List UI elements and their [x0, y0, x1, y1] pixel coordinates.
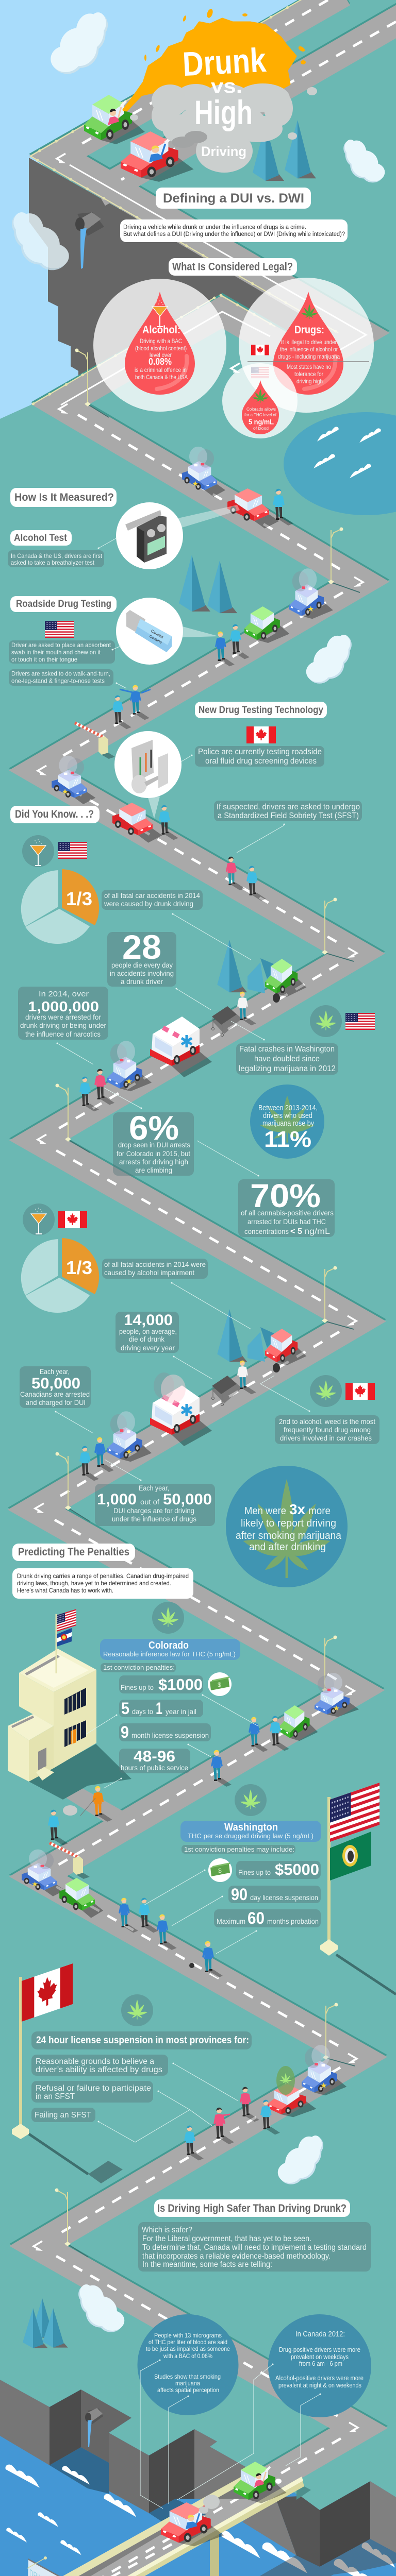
stat: 50,000 arrests: Each year,: [40, 1367, 70, 1376]
reason 3: Failing an SFST: [35, 2111, 91, 2120]
heading: [31, 2031, 252, 2049]
text: breathalyzer: [8, 550, 104, 567]
public service: [119, 1748, 190, 1773]
header: [100, 1639, 240, 1660]
stat: 70 percent: < 5: [290, 1227, 302, 1236]
text: Canada fatal accidents: [102, 1259, 208, 1279]
reason 2: [31, 2081, 153, 2103]
probation: Maximum: [217, 1917, 245, 1925]
title splash: [124, 8, 317, 173]
text: oral fluid devices: [195, 746, 324, 767]
panel: colorado THC limit: 5 ng/mL: [249, 417, 274, 426]
heading: defining a DUI vs DWI: Defining a DUI vs. DWI: [163, 191, 304, 206]
fine: $1000: [158, 1675, 203, 1693]
heading: is driving high safer: [154, 2199, 350, 2217]
public service: 48-96: [134, 1748, 175, 1765]
stat: 14,000: driving every year: [121, 1344, 175, 1352]
panel: colorado THC limit: of blood: [253, 426, 269, 431]
text: Washington crashes: have doubled since: [254, 1055, 320, 1063]
text: sobriety moves: Drivers are asked to do walk-and-turn,: [11, 670, 110, 677]
panel: drugs: [239, 278, 374, 413]
magnifier: breathalyzer: [116, 502, 240, 569]
stat: 28: 28: [122, 928, 161, 966]
pie chart: Canada fatal accidents: 1/3: [66, 1257, 92, 1278]
magnifier: swab test strip: Canabis: [150, 629, 164, 639]
flag: USA: [45, 621, 74, 638]
panel: drugs: driving high: [296, 378, 323, 385]
probation: months probation: [267, 1917, 319, 1925]
flag: Canada: [246, 726, 276, 743]
text: standardized field sobriety test: If suspected, drivers are asked to undergo: [217, 803, 360, 811]
icon: leaf: [235, 1784, 267, 1816]
panel: colorado THC limit: for a THC level of: [244, 412, 277, 417]
flags on jail: [57, 1609, 76, 1632]
panel: drugs: drugs - including marijuana: [278, 353, 340, 360]
heading: roadside drug testing: Roadside Drug Testing: [16, 599, 111, 609]
lake: [284, 412, 396, 515]
stat: 1,000,000: drivers were arrested for: [25, 1013, 101, 1021]
exhaust puffs on bridge: [199, 2479, 282, 2514]
text: standardized field sobriety test: a Standardized Field Sobriety Test (SFST): [218, 811, 359, 820]
barriers: [50, 723, 115, 1879]
text: sobriety moves: [9, 669, 113, 686]
pie chart: US fatal accidents: 1/3: [66, 888, 92, 909]
text: weed second to alcohol: 2nd to alcohol, weed is the most: [279, 1417, 375, 1426]
stat: men 3x more likely: 3x: [289, 1501, 305, 1517]
people: [49, 489, 293, 2160]
stat: 1,000,000: In 2014, over: [39, 990, 89, 998]
heading: predicting the penalties: Predicting The Penalties: [18, 1546, 129, 1558]
license suspension: [228, 1885, 321, 1904]
stat: 6 percent: arrests for driving high: [119, 1158, 188, 1166]
stat: 11 percent: marijuana rose by: [262, 1120, 315, 1128]
panel: colorado penalties: [100, 1602, 240, 1773]
text: standardized field sobriety test: [214, 801, 362, 821]
heading: alcohol test: Alcohol Test: [14, 533, 68, 544]
text: swab: swab in their mouth and chew on it: [11, 649, 101, 656]
circle: Canada 2012: prevalent on weekdays: [291, 2353, 349, 2361]
magnifier: swab test strip: [116, 598, 219, 665]
circle: Canada 2012: prevalent at night & on weekends: [278, 2382, 361, 2389]
large flagpole: USA and Washington: [320, 1783, 396, 1994]
stat: 70 percent: of all cannabis-positive drivers: [241, 1209, 334, 1217]
magnifier: swab test strip: Cocaine: [148, 634, 163, 645]
icon: martini with US flag: [22, 835, 87, 867]
circle: Canada 2012: Drug-positive drivers were more: [279, 2346, 360, 2353]
stat: 70 percent: [238, 1177, 335, 1237]
circle: Canada 2012: from 6 am - 6 pm: [299, 2360, 342, 2367]
connector lines: [55, 538, 321, 2509]
fine: [119, 1675, 203, 1693]
reason 1: Reasonable grounds to believe a: [36, 2057, 154, 2066]
pie chart: US fatal accidents: [21, 869, 99, 944]
circle: THC facts: People with 13 micrograms: [154, 2332, 222, 2339]
stat: men 3x more likely: and after drinking: [249, 1541, 326, 1553]
icon: martini with Canada flag: [23, 1204, 87, 1235]
stat: 6 percent: are climbing: [135, 1166, 172, 1174]
stat: 50,000 arrests: Canadians are arrested: [20, 1390, 90, 1398]
stat: 28: a drunk driver: [121, 977, 163, 986]
reason 2: in an SFST: [36, 2092, 75, 2101]
license suspension: 90: [231, 1885, 248, 1904]
stat: men 3x more likely: after smoking marijuana: [236, 1530, 342, 1541]
stat: 1,000 out of 50,000: Each year,: [139, 1484, 169, 1492]
text: which is safer: In the meantime, some facts are telling:: [142, 2260, 272, 2269]
text: Canada fatal accidents: of all fatal accidents in 2014 were: [104, 1261, 206, 1268]
stat: 28: in accidents involving: [110, 969, 174, 977]
panel: drugs: the influence of alcohol or: [280, 346, 338, 353]
stat: 1,000,000: the influence of narcotics: [25, 1030, 101, 1038]
smoke cloud: [130, 83, 317, 173]
large flagpole: Canada: [12, 1963, 123, 2183]
panel: alcohol: level over: [150, 351, 172, 359]
fine: Fines up to: [121, 1683, 154, 1691]
stat: 6 percent: [113, 1109, 194, 1176]
heading: what is considered legal: What Is Considered Legal?: [172, 261, 293, 273]
stat: men 3x more likely: more: [308, 1505, 331, 1517]
header: THC per se drugged driving law (5 ng/mL): [188, 1832, 314, 1840]
jail driveway: [57, 1783, 124, 1823]
title text: Driving: [201, 144, 246, 159]
stat: 1,000 out of 50,000: 1,000: [97, 1491, 137, 1508]
circle: THC facts: [137, 2314, 238, 2415]
intro text: [120, 219, 348, 242]
stat: 50,000 arrests: 50,000: [31, 1375, 80, 1392]
stat: men 3x more likely: Men were: [244, 1505, 286, 1517]
fine: Fines up to: [238, 1868, 271, 1876]
icon: money: [208, 1672, 232, 1696]
text: Washington crashes: Fatal crashes in Washington: [239, 1045, 335, 1054]
icon: leaf: [121, 1994, 153, 2026]
stat: 70 percent: concentrations: [244, 1227, 289, 1235]
bridge: [0, 2473, 304, 2576]
solid lane lines: [61, 165, 366, 405]
broken trees at crash scenes: [248, 958, 278, 1362]
jail term: days to: [132, 1707, 153, 1716]
stat: 1,000,000: drunk driving or being under: [20, 1021, 106, 1029]
intro text: But what defines a DUI (Driving under the influence) or DWI (Driving while intoxicated)?: [123, 231, 345, 238]
heading: did you know: Did You Know. . .?: [15, 808, 94, 820]
heading: how is it measured: [10, 488, 117, 507]
text: Canada fatal accidents: caused by alcohol impairment: [104, 1269, 194, 1277]
reason 1: driver’s ability is affected by drugs: [36, 2065, 162, 2074]
heading: alcohol test: [10, 530, 72, 546]
heading: new drug testing technology: [195, 702, 327, 718]
panel: colorado THC limit: [222, 363, 298, 438]
heading: predicting the penalties: [12, 1544, 135, 1561]
title text: [182, 41, 267, 159]
circle: THC facts: Studies show that smoking: [154, 2373, 221, 2380]
text: breathalyzer: asked to take a breathalyzer test: [11, 559, 95, 566]
second drain pipe: [85, 2408, 103, 2447]
text: penalties intro: driving laws, though, have yet to be determined and created.: [17, 1580, 171, 1587]
background: sky: [0, 0, 396, 464]
jail term: [119, 1699, 203, 1718]
panel: colorado THC limit: Colorado allows: [246, 406, 276, 412]
heading: new drug testing technology: New Drug Testing Technology: [199, 705, 323, 716]
probation: [214, 1909, 321, 1927]
heading: defining a DUI vs DWI: [156, 188, 311, 209]
stat: 70 percent: arrested for DUIs had THC: [248, 1217, 326, 1226]
stat: 1,000,000: [18, 987, 108, 1040]
text: weed second to alcohol: drivers involved in car crashes: [280, 1434, 372, 1442]
stat: 50,000 arrests: [20, 1366, 91, 1408]
stat: 70 percent: 70%: [250, 1177, 321, 1214]
stat: 1,000 out of 50,000: out of: [140, 1498, 159, 1506]
sign: drive carefully: [27, 2556, 82, 2576]
stat: 11 percent: Between 2013-2014,: [258, 1104, 318, 1112]
street sweeping dust: [63, 1798, 95, 1816]
stat: 14,000: people, on average,: [119, 1327, 177, 1335]
circle: THC facts: marijuana: [175, 2380, 200, 2387]
header: [180, 1821, 321, 1842]
heading: how is it measured: How Is It Measured?: [14, 492, 114, 503]
text: US fatal accidents: were caused by drunk driving: [104, 900, 193, 908]
fine: $5000: [275, 1860, 319, 1878]
text: breathalyzer: In Canada & the US, drivers are first: [11, 552, 103, 560]
icon: money: $: [218, 1867, 222, 1874]
circle: THC facts: affects spatial perception: [157, 2386, 219, 2394]
stat: 28: [107, 928, 176, 987]
panel: washington penalties: [180, 1784, 321, 1927]
stat: 1,000 out of 50,000: DUI charges are for driving: [113, 1506, 194, 1515]
icon: leaf: [152, 1602, 184, 1634]
text: swab: [9, 640, 115, 664]
stretchers: [211, 1006, 242, 1405]
header: Colorado: [148, 1640, 189, 1651]
header: Reasonable inference law for THC (5 ng/mL): [103, 1650, 236, 1658]
penalties label: 1st conviction penalties may include:: [184, 1845, 294, 1853]
intro text: Driving a vehicle while drunk or under the influence of drugs is a crime.: [123, 225, 306, 231]
stat: 6 percent: for Colorado in 2015, but: [117, 1149, 190, 1158]
reason 1: [31, 2055, 168, 2076]
circle: Canada 2012: In Canada 2012:: [295, 2330, 345, 2338]
stat: 1,000 out of 50,000: [95, 1484, 215, 1526]
circle: Canada 2012: [268, 2314, 371, 2417]
text: sobriety moves: one-leg-stand & finger-to-nose tests: [11, 677, 105, 684]
text: penalties intro: [12, 1568, 193, 1599]
stat: 14,000: 14,000: [124, 1312, 173, 1329]
pie chart: Canada fatal accidents: [21, 1238, 99, 1313]
probation: 60: [248, 1909, 265, 1927]
license suspension: [119, 1723, 211, 1741]
public service: hours of public service: [121, 1764, 188, 1772]
heading: roadside drug testing: [10, 596, 117, 612]
background: water: [0, 2349, 396, 2576]
stat: 1,000 out of 50,000: under the influence of drugs: [112, 1515, 196, 1523]
stat: 1,000 out of 50,000: 50,000: [163, 1491, 212, 1508]
license suspension: month license suspension: [131, 1731, 209, 1739]
icon: leaf with Canada flag: [310, 1375, 375, 1407]
circle: THC facts: to be just as impaired as someone: [146, 2345, 230, 2352]
stat: 50,000 arrests: and charged for DUI: [26, 1398, 86, 1406]
text: which is safer: To determine that, Canada will need to implement a testing standard: [142, 2243, 367, 2252]
fine: [236, 1860, 321, 1879]
stat: men 3x more likely: [226, 1466, 348, 1587]
circle: Canada 2012: Alcohol-positive drivers were more: [275, 2375, 364, 2382]
panel: drugs: tolerance for: [294, 370, 323, 378]
stat: 11 percent: drivers who used: [263, 1112, 312, 1120]
text: US fatal accidents: of all fatal car accidents in 2014: [104, 892, 200, 900]
license suspension: day license suspension: [250, 1893, 318, 1902]
text: which is safer: For the Liberal government, that has yet to be seen.: [142, 2234, 311, 2243]
stat: 1,000,000: 1,000,000: [28, 998, 99, 1014]
title text: Drunk: [182, 41, 267, 83]
stat: 14,000: die of drunk: [129, 1335, 165, 1343]
panel: alcohol: Driving with a BAC: [140, 337, 182, 345]
panel: canada suspension: [31, 1994, 252, 2122]
panel: alcohol: 0.08%: [148, 357, 172, 367]
trees: [23, 120, 316, 2348]
stat: 28: people die every day: [111, 961, 173, 969]
heading: what is considered legal: [169, 258, 297, 276]
text: weed second to alcohol: [275, 1415, 380, 1444]
reason 2: Refusal or failure to participate: [36, 2084, 151, 2093]
upper cliff face: [29, 158, 338, 384]
bridge shadow on water: [0, 2539, 396, 2576]
panel: alcohol: Alcohol:: [142, 324, 180, 336]
heading: 24 hour license suspension in most provinces for:: [36, 2035, 249, 2046]
turn arrows: [34, 154, 363, 2432]
penalties label: 1st conviction penalties:: [103, 1664, 175, 1671]
text: weed second to alcohol: frequently found drug among: [284, 1426, 371, 1434]
text: US fatal accidents: [102, 890, 203, 910]
panel: drugs: Most states have no: [287, 363, 331, 370]
drain pipe: [75, 212, 104, 269]
lamp posts: [55, 348, 360, 2257]
jail term: year in jail: [166, 1707, 196, 1716]
text: Washington crashes: [236, 1043, 338, 1075]
stat: 11 percent: [250, 1084, 324, 1159]
magnifier: oral fluid device: [114, 731, 182, 819]
circle: THC facts: of THC per liter of blood are said: [148, 2338, 227, 2346]
text: penalties intro: Drunk driving carries a range of penalties. Canadian drug-impaired: [17, 1572, 189, 1580]
panel: alcohol: is a criminal offence in: [135, 366, 187, 374]
jail term: 1: [156, 1699, 162, 1718]
text: oral fluid devices: Police are currently testing roadside: [198, 748, 322, 756]
title text: High: [194, 93, 253, 131]
heading: is driving high safer: Is Driving High Safer Than Driving Drunk?: [157, 2202, 346, 2214]
circle: THC facts: with a BAC of 0.08%: [163, 2352, 212, 2360]
text: swab: Driver are asked to place an absorbent: [11, 641, 111, 649]
stat: 11 percent: 11%: [264, 1127, 311, 1152]
header: Washington: [224, 1822, 278, 1833]
panel: alcohol: [93, 279, 226, 412]
water waves: [5, 2465, 395, 2576]
text: which is safer: Which is safer?: [142, 2226, 192, 2234]
icon: money: [208, 1858, 232, 1882]
stat: men 3x more likely: likely to report driving: [241, 1518, 336, 1529]
panel: alcohol: both Canada & the USA: [135, 374, 188, 381]
text: penalties intro: Here’s what Canada has to work with.: [17, 1587, 113, 1594]
text: which is safer: that incorporates a reliable evidence-based methodology.: [142, 2252, 331, 2261]
panel: drugs: Drugs:: [294, 324, 324, 336]
heading: did you know: [10, 806, 100, 823]
jail term: 5: [121, 1699, 129, 1718]
text: Washington crashes: legalizing marijuana in 2012: [239, 1064, 336, 1073]
lower cliffs: [0, 2380, 396, 2567]
text: oral fluid devices: oral fluid drug screening devices: [205, 757, 317, 766]
stat: 6 percent: drop seen in DUI arrests: [118, 1141, 190, 1149]
reason 3: [31, 2108, 95, 2122]
stat: 14,000: [116, 1312, 179, 1353]
road fences: [30, 0, 338, 404]
title text: vs.: [211, 76, 242, 97]
text: which is safer: [138, 2222, 371, 2272]
panel: drugs: It is illegal to drive under: [281, 338, 337, 346]
icon: leaf with US flag: [310, 1005, 375, 1037]
text: swab: or touch it on their tongue: [11, 656, 77, 663]
leaf bubble above car: [276, 2066, 295, 2095]
jail building: [8, 1609, 131, 1800]
stat: 70 percent: ng/mL: [304, 1227, 330, 1236]
license suspension: 9: [121, 1723, 129, 1741]
stat: 6 percent: 6%: [129, 1109, 179, 1147]
icon: money: $: [218, 1681, 221, 1688]
panel: alcohol: (blood alcohol content): [135, 345, 187, 352]
